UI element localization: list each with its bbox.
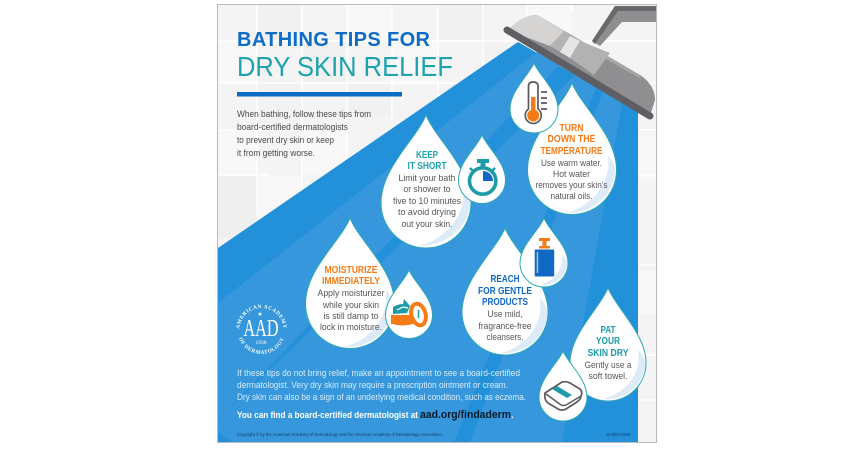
tip: keep it short: IT SHORT: [408, 161, 447, 172]
find a dermatologist line: [237, 409, 514, 421]
tip: turn down the temperature: TEMPERATURE: [540, 146, 603, 157]
tip: reach for gentle products: [462, 228, 548, 355]
AAD logo: [236, 304, 287, 354]
find a dermatologist line: .: [511, 410, 514, 421]
tip: keep it short: or shower to: [404, 184, 450, 195]
tip: keep it short: five to 10 minutes: [393, 196, 461, 207]
tip: reach for gentle products: fragrance-free: [478, 321, 532, 332]
shower pipe: [592, 6, 656, 46]
AAD logo: AMERICAN ACADEMY: [236, 304, 287, 329]
tip: pat your skin dry: [570, 288, 646, 401]
title: BATHING TIPS FOR: [237, 29, 431, 51]
title: DRY SKIN RELIEF: [237, 51, 453, 82]
tip: turn down the temperature: [528, 83, 616, 214]
AAD logo: 1938: [256, 340, 267, 346]
find a dermatologist line: aad.org/findaderm: [420, 409, 511, 421]
icon: folded towel drop: [539, 351, 587, 421]
closing advice text: dermatologist. Very dry skin may require a prescription ointment or cream.: [237, 380, 508, 391]
tip: turn down the temperature: TURN: [560, 123, 584, 134]
tip: moisturize immediately: is still damp to: [324, 311, 378, 322]
tip: turn down the temperature: Use warm water.: [541, 158, 602, 169]
closing advice text: Dry skin can also be a sign of an underlying medical condition, such as eczema.: [237, 392, 526, 403]
tip: reach for gentle products: Use mild,: [488, 309, 522, 320]
AAD logo: AAD: [244, 316, 278, 342]
tip: pat your skin dry: YOUR: [596, 336, 620, 347]
tip: keep it short: to avoid drying: [398, 207, 456, 218]
tip: moisturize immediately: while your skin: [322, 300, 379, 311]
icon: thermometer drop: [510, 63, 558, 133]
tip: moisturize immediately: lock in moisture.: [320, 322, 382, 333]
intro text: to prevent dry skin or keep: [237, 135, 334, 146]
tip: keep it short: KEEP: [416, 150, 438, 161]
copyright: Copyright © by the American Academy of Dermatology and the American Academy of Dermatology Association.: [237, 431, 443, 437]
tip: pat your skin dry: SKIN DRY: [588, 348, 629, 359]
tip: pat your skin dry: soft towel.: [588, 371, 628, 382]
intro text: [237, 109, 371, 159]
tip: reach for gentle products: cleansers.: [486, 332, 524, 343]
water spray: [218, 42, 638, 442]
tip: turn down the temperature: removes your skin’s: [536, 180, 608, 191]
tip: reach for gentle products: PRODUCTS: [482, 297, 528, 308]
shower head: [507, 6, 656, 116]
title: [237, 29, 453, 82]
tip: keep it short: [381, 115, 471, 248]
find a dermatologist line: You can find a board-certified dermatologist at: [237, 410, 419, 421]
tile wall background: [218, 4, 656, 442]
tip: moisturize immediately: [306, 218, 394, 348]
tip: turn down the temperature: Hot water: [553, 169, 590, 180]
tip: pat your skin dry: PAT: [600, 325, 616, 336]
tip: moisturize immediately: MOISTURIZE: [324, 265, 378, 276]
icon: stopwatch drop: [458, 135, 506, 204]
tip: moisturize immediately: Apply moisturizer: [318, 288, 384, 299]
tip: keep it short: out your skin.: [402, 219, 452, 230]
tip: reach for gentle products: FOR GENTLE: [478, 286, 532, 297]
icon: moisturizer jar drop: [386, 270, 432, 338]
tip: turn down the temperature: DOWN THE: [548, 134, 596, 145]
tip: turn down the temperature: natural oils.: [550, 191, 592, 202]
document code: 19-684-CMM: [606, 432, 630, 437]
AAD logo: OF DERMATOLOGY: [240, 337, 284, 354]
intro text: board-certified dermatologists: [237, 122, 348, 133]
AAD logo: ★: [257, 311, 263, 318]
closing advice text: If these tips do not bring relief, make an appointment to see a board-certified: [237, 368, 520, 379]
tip: moisturize immediately: IMMEDIATELY: [322, 276, 380, 287]
closing advice text: [237, 368, 526, 403]
tip: pat your skin dry: Gently use a: [584, 360, 632, 371]
intro text: When bathing, follow these tips from: [237, 109, 371, 120]
tip: keep it short: Limit your bath: [398, 173, 456, 184]
intro text: it from getting worse.: [237, 148, 315, 159]
title rule: [237, 92, 402, 96]
tip: reach for gentle products: REACH: [490, 274, 520, 285]
icon: cleanser pump bottle drop: [520, 218, 568, 287]
